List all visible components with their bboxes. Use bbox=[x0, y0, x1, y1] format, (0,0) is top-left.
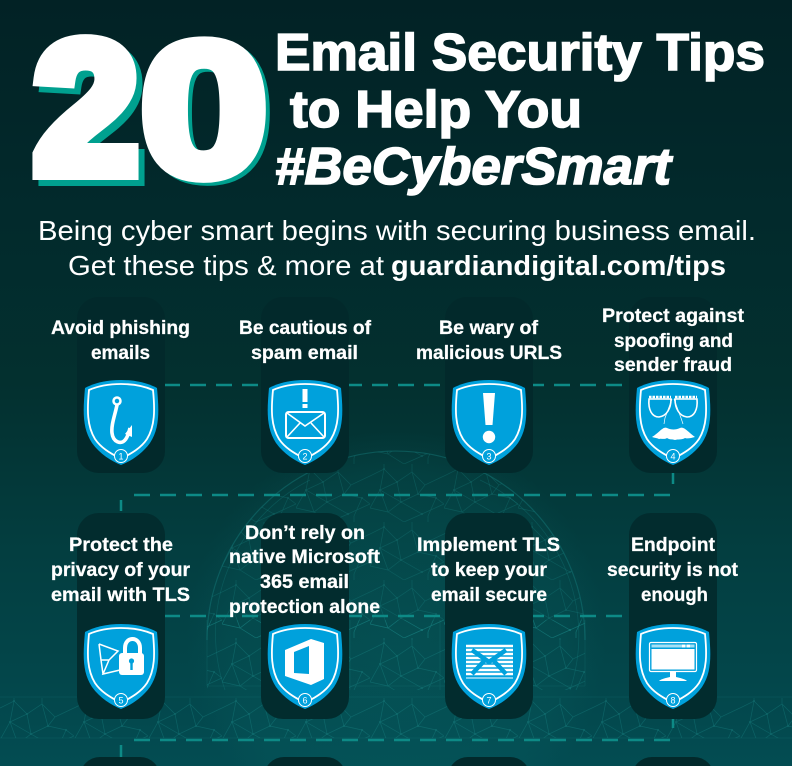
tip 6: Don’t rely on bbox=[245, 523, 365, 544]
subtitle: Being cyber smart begins with securing business email. bbox=[38, 215, 756, 246]
globe network background bbox=[0, 400, 792, 766]
icon: envelope alert shield: 2 bbox=[302, 452, 308, 462]
subtitle: Get these tips & more at bbox=[68, 250, 384, 281]
title: to Help You bbox=[290, 81, 582, 139]
icon: envelope and lock shield: 5 bbox=[118, 696, 124, 706]
dashed connector path bbox=[121, 385, 673, 760]
icon: monitor shield: 8 bbox=[670, 696, 676, 706]
icon: striped envelope shield: 7 bbox=[486, 696, 492, 706]
icon: envelope alert shield bbox=[268, 380, 342, 465]
icon: envelope and lock shield bbox=[84, 624, 158, 709]
big number 20 bbox=[34, 4, 272, 219]
title bbox=[275, 24, 765, 196]
icon: disguise mask shield bbox=[636, 380, 710, 465]
tip 6 bbox=[229, 513, 381, 719]
icon: disguise mask shield: 4 bbox=[670, 452, 676, 462]
title: #BeCyberSmart bbox=[275, 138, 674, 196]
icon: monitor shield bbox=[636, 624, 710, 709]
icon: exclamation shield bbox=[452, 380, 526, 465]
big number 20: 2 bbox=[40, 11, 144, 218]
tip 7: to keep your bbox=[431, 560, 548, 581]
icon: office logo shield: 6 bbox=[302, 696, 308, 706]
subtitle bbox=[38, 215, 756, 281]
icon: striped envelope shield bbox=[452, 624, 526, 709]
icon: fish hook shield bbox=[84, 380, 158, 465]
tip 6: 365 email bbox=[260, 572, 349, 593]
big number 20: 0 bbox=[144, 7, 272, 219]
tip 5: Protect the bbox=[69, 535, 173, 556]
tip 7: Implement TLS bbox=[417, 535, 560, 556]
tip 3 bbox=[416, 297, 562, 473]
tip 6: native Microsoft bbox=[229, 547, 381, 568]
tip 2: spam email bbox=[251, 343, 358, 364]
tip 5: privacy of your bbox=[51, 560, 191, 581]
big number 20: 0 bbox=[140, 4, 268, 216]
tip 2: Be cautious of bbox=[239, 318, 372, 339]
tip 7 bbox=[417, 513, 560, 719]
tip 4: spoofing and bbox=[614, 331, 733, 352]
tip 4: Protect against bbox=[602, 306, 745, 327]
icon: office logo shield bbox=[268, 624, 342, 709]
tip 1: emails bbox=[91, 343, 150, 364]
icon: fish hook shield: 1 bbox=[118, 452, 124, 462]
tip 2 bbox=[239, 297, 372, 473]
tip 3: malicious URLS bbox=[416, 343, 562, 364]
tip 4 bbox=[602, 297, 745, 473]
next row panel tops bbox=[80, 757, 714, 766]
tip 5 bbox=[51, 513, 191, 719]
subtitle: guardiandigital.com/tips bbox=[391, 250, 726, 281]
tip 8: security is not bbox=[607, 560, 739, 581]
tip 1: Avoid phishing bbox=[51, 318, 190, 339]
big number 20: 2 bbox=[34, 5, 138, 212]
tip 7: email secure bbox=[431, 585, 547, 606]
tip 8: enough bbox=[641, 585, 708, 606]
tip 3: Be wary of bbox=[439, 318, 539, 339]
tip 4: sender fraud bbox=[614, 355, 732, 376]
tip 1 bbox=[51, 297, 190, 473]
tip 8 bbox=[607, 513, 739, 719]
icon: exclamation shield: 3 bbox=[486, 452, 492, 462]
tip 6: protection alone bbox=[229, 597, 380, 618]
title: Email Security Tips bbox=[275, 24, 765, 82]
tip 8: Endpoint bbox=[631, 535, 716, 556]
tip 5: email with TLS bbox=[51, 585, 190, 606]
